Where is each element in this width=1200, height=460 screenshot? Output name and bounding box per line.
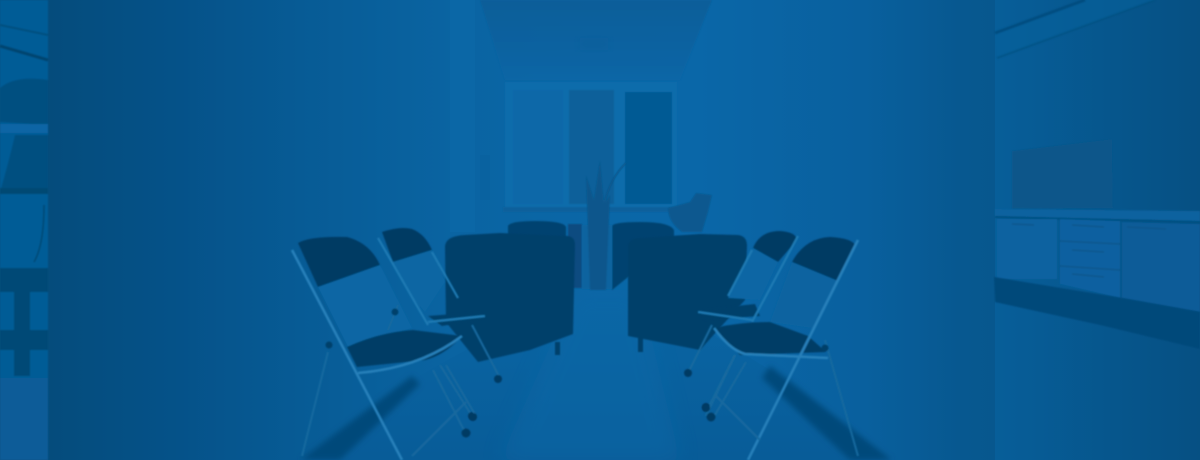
side table xyxy=(0,268,48,376)
radiator and vase plant xyxy=(582,160,626,290)
right front folding chair xyxy=(702,237,858,460)
shelf plants xyxy=(0,79,48,192)
floor xyxy=(300,290,890,460)
floor skirting strips xyxy=(300,366,892,460)
dark plinth band xyxy=(994,277,1200,349)
right armchair xyxy=(628,234,747,352)
left rear folding chair xyxy=(378,228,502,420)
ceiling xyxy=(480,0,712,80)
left front folding chair xyxy=(292,237,477,460)
window xyxy=(503,82,678,212)
door frame by window xyxy=(480,155,490,200)
wall mounted screen xyxy=(1012,139,1113,209)
left armchair xyxy=(445,233,575,362)
potted plant xyxy=(668,193,712,232)
kitchen counter and cabinets xyxy=(995,209,1200,312)
left side room xyxy=(0,0,48,460)
back armchairs xyxy=(508,221,674,290)
right kitchen wall xyxy=(995,0,1200,460)
right rear folding chair xyxy=(684,231,798,412)
